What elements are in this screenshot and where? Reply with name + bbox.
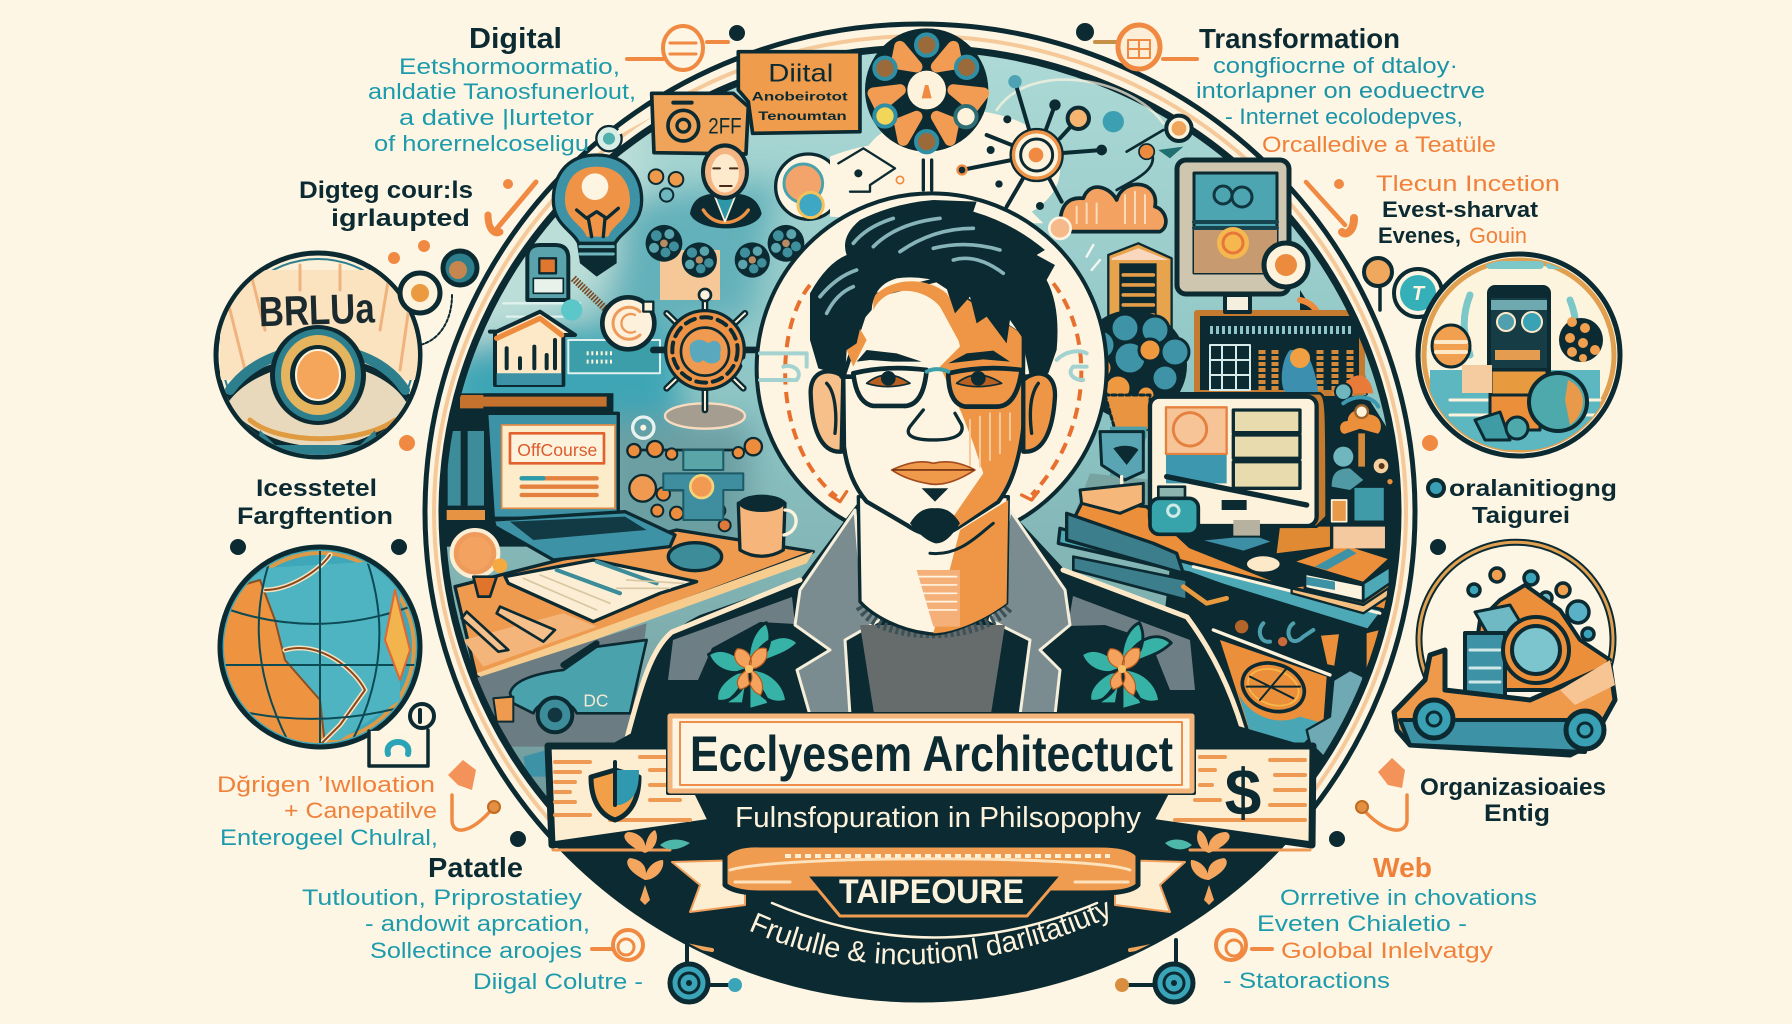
text block: transformation: Orcalledive a Teatüle <box>1262 132 1496 157</box>
man portrait icon <box>690 143 762 228</box>
flower: right lapel <box>1081 623 1171 710</box>
text block: transformation <box>1196 23 1496 157</box>
glasses <box>842 368 1027 407</box>
digital tag <box>738 52 860 133</box>
icon: orange ring bottom left <box>592 930 643 960</box>
text block: left middle: Fargftention <box>237 503 393 530</box>
text block: patatle: Tutloution, Priprostatiey <box>302 885 582 910</box>
banner <box>544 712 1316 965</box>
neck <box>858 497 1008 634</box>
books <box>1292 543 1391 613</box>
text: tag code: 2FF <box>708 113 742 138</box>
text block: telecom: Tlecun Incetion <box>1376 171 1560 196</box>
text block: telecom: Gouin <box>1469 223 1527 248</box>
network node <box>956 75 1107 210</box>
text block: web <box>1223 852 1537 993</box>
text block: organizational <box>1420 774 1606 827</box>
building <box>1108 243 1172 343</box>
cloud <box>1049 184 1166 239</box>
camera tag <box>652 93 748 154</box>
hub <box>865 28 988 190</box>
text block: organizational: Entig <box>1484 800 1550 827</box>
decorative arc <box>772 903 1097 938</box>
text block: transformation: intorlapner on eoduectrve <box>1196 78 1485 103</box>
desk top <box>455 530 813 678</box>
blue globe <box>1529 373 1587 431</box>
scene contents <box>446 53 1394 796</box>
icon: upper right network hub and devices <box>830 28 1192 270</box>
text block: left lower: Dğrigen ʼIwlloation <box>217 772 435 797</box>
flower: left small <box>624 830 690 905</box>
subtitle: Fulnsfopuration in Philsopophy <box>735 802 1142 834</box>
car <box>1394 650 1615 755</box>
sweater <box>860 625 1005 720</box>
icon: bottom right connector <box>1115 940 1193 1002</box>
place name: TAIPEOURE <box>839 873 1024 911</box>
text: eye label: BRLUa <box>258 284 376 335</box>
icon: left shelf and laptop scene <box>430 393 813 777</box>
mouth <box>892 462 975 484</box>
teal rocks <box>1307 670 1363 760</box>
panel: phone circle <box>1418 254 1620 456</box>
icon: dollar sign: $ <box>1225 755 1261 829</box>
ring stroke overlay <box>442 48 1398 976</box>
desk <box>1074 502 1388 608</box>
goatee <box>922 488 948 502</box>
icon: teal badge: T <box>1412 283 1426 305</box>
monitor <box>1150 393 1327 552</box>
panel: car circle <box>1394 542 1615 755</box>
icon: orange dots left <box>388 240 430 451</box>
icon: cube and hook left <box>448 760 526 847</box>
panel: globe <box>215 547 420 747</box>
person portrait <box>810 200 1058 634</box>
icon: orange ring bottom right <box>1216 930 1272 960</box>
text block: digital: anldatie Tanosfunerlout, <box>368 79 636 104</box>
hair <box>810 200 1058 377</box>
icon: dots above globe <box>230 539 407 555</box>
icon: bottom left connector <box>670 940 742 1002</box>
text block: web: - Statoractions <box>1223 968 1390 993</box>
icon: top left badge <box>627 25 745 70</box>
text block: telecom: Evest-sharvat <box>1382 197 1539 222</box>
text: car lettering: DC <box>583 691 608 711</box>
bubble <box>776 154 841 219</box>
text block: digital courses: igrlaupted <box>331 205 470 232</box>
icon: top right badge <box>1076 23 1197 69</box>
jacket lapels <box>795 510 1070 715</box>
panel: eye circle <box>216 253 420 460</box>
gear emblem <box>653 289 757 410</box>
car and road <box>470 623 647 747</box>
honeycomb <box>1559 317 1603 362</box>
book <box>505 560 697 622</box>
text block: digital courses <box>299 177 473 232</box>
icon: right desk and monitor scene <box>1058 375 1393 760</box>
digital tag: Anobeirotot <box>752 90 848 104</box>
bottom orange panel <box>1212 582 1379 742</box>
text block: left middle <box>237 475 393 530</box>
left ribbon <box>548 746 712 850</box>
text block: patatle: Sollectince aroojes <box>370 938 582 963</box>
text block: web: Orrretive in chovations <box>1280 885 1537 910</box>
shield goblet <box>1100 432 1143 480</box>
ribbon: place name <box>672 845 1185 916</box>
pens <box>462 612 508 652</box>
text block: telecom: Evenes, <box>1378 223 1461 248</box>
C badge <box>602 297 654 349</box>
right ribbon <box>1150 746 1313 850</box>
text block: left lower <box>217 772 438 850</box>
laptop <box>487 413 618 518</box>
ears <box>811 371 843 452</box>
text block: patatle: Diigal Colutre - <box>473 969 643 994</box>
icon: upper left technology icons <box>460 52 860 410</box>
lightbulb <box>553 155 642 277</box>
icon: teal badge <box>1394 269 1442 317</box>
curved caption: Frululle & incutionl darlitatiuty <box>750 902 1108 965</box>
person jacket <box>610 500 1250 790</box>
title: Ecclyesem Architectuct <box>690 726 1173 782</box>
jar <box>1150 487 1198 534</box>
icon: cube and hook right <box>1329 758 1407 847</box>
eyebrows <box>857 350 922 362</box>
eyes <box>867 375 910 387</box>
text block: transformation: Transformation <box>1199 23 1400 54</box>
icon: small rings left <box>400 251 477 345</box>
angle icon <box>838 148 895 192</box>
text: tag title: Diital <box>768 61 833 88</box>
icon: globe tag <box>369 704 434 766</box>
arrow: right check <box>1306 179 1354 233</box>
text block: organizing <box>1428 475 1617 528</box>
phone <box>1487 285 1551 385</box>
digital tag: Tenoumtan <box>758 109 847 123</box>
ornament <box>1340 411 1381 434</box>
small bubbles <box>1468 568 1594 640</box>
text block: transformation: - Internet ecolodepves, <box>1225 104 1463 129</box>
right dark cabinet <box>1165 290 1394 766</box>
server tag <box>527 245 568 300</box>
text block: organizing: oralanitiogng <box>1449 475 1617 501</box>
face <box>843 280 1023 535</box>
bottom dark field <box>563 726 1294 998</box>
eye iris <box>270 325 366 425</box>
person small <box>1462 365 1492 393</box>
network of orange nodes <box>633 450 753 490</box>
text block: patatle: Patatle <box>428 852 523 883</box>
text block: organizing: Taigurei <box>1472 502 1570 528</box>
teal line from tag <box>596 126 622 151</box>
text block: digital: a dative |lurtetor <box>399 105 594 130</box>
magnifier lamp <box>452 530 498 577</box>
text block: organizational: Organizasioaies <box>1420 774 1606 801</box>
text block: digital <box>368 23 636 156</box>
flower: left lapel <box>708 623 798 710</box>
text block: web: Golobal Inlelvatgy <box>1281 938 1493 963</box>
data panel <box>1197 313 1362 395</box>
text block: left lower: + Canepatilve <box>284 798 437 823</box>
text block: web: Eveten Chialetio - <box>1257 911 1467 936</box>
icon: small pin right <box>1364 258 1392 310</box>
title plaque <box>668 714 1194 793</box>
panel: central circular scene <box>400 24 1450 1010</box>
tablet <box>1177 160 1289 312</box>
flower: right small <box>1165 830 1230 905</box>
text block: digital: Digital <box>469 23 562 55</box>
arrow: check mark left <box>488 179 536 233</box>
mouse and mug <box>668 543 722 571</box>
portrait halo <box>757 193 1107 543</box>
text block: transformation: congfiocrne of dtaloy· <box>1213 53 1458 78</box>
flower cluster <box>1102 312 1190 432</box>
outer ring <box>425 24 1415 1000</box>
icon: shield <box>591 762 639 820</box>
house chart <box>490 312 575 385</box>
text block: left middle: Icesstetel <box>256 475 377 502</box>
text block: web: Web <box>1373 852 1432 883</box>
text block: digital courses: Digteg cour:ls <box>299 177 473 204</box>
text block: digital: of horernelcoseligu <box>374 131 589 156</box>
text block: left lower: Enterogeel Chulral, <box>220 825 438 850</box>
text block: digital: Eetshormoormatio, <box>399 54 620 79</box>
orange dots <box>649 169 663 184</box>
text block: patatle: - andowit aprcation, <box>365 911 590 936</box>
orange planet <box>1432 325 1470 367</box>
text block: telecom <box>1376 171 1560 248</box>
gear body <box>1470 585 1610 690</box>
molecule clusters <box>646 225 682 262</box>
text block: patatle <box>302 852 643 994</box>
text: screen label: OffCourse <box>517 440 597 460</box>
mouse <box>1247 556 1280 572</box>
nose <box>908 410 962 440</box>
